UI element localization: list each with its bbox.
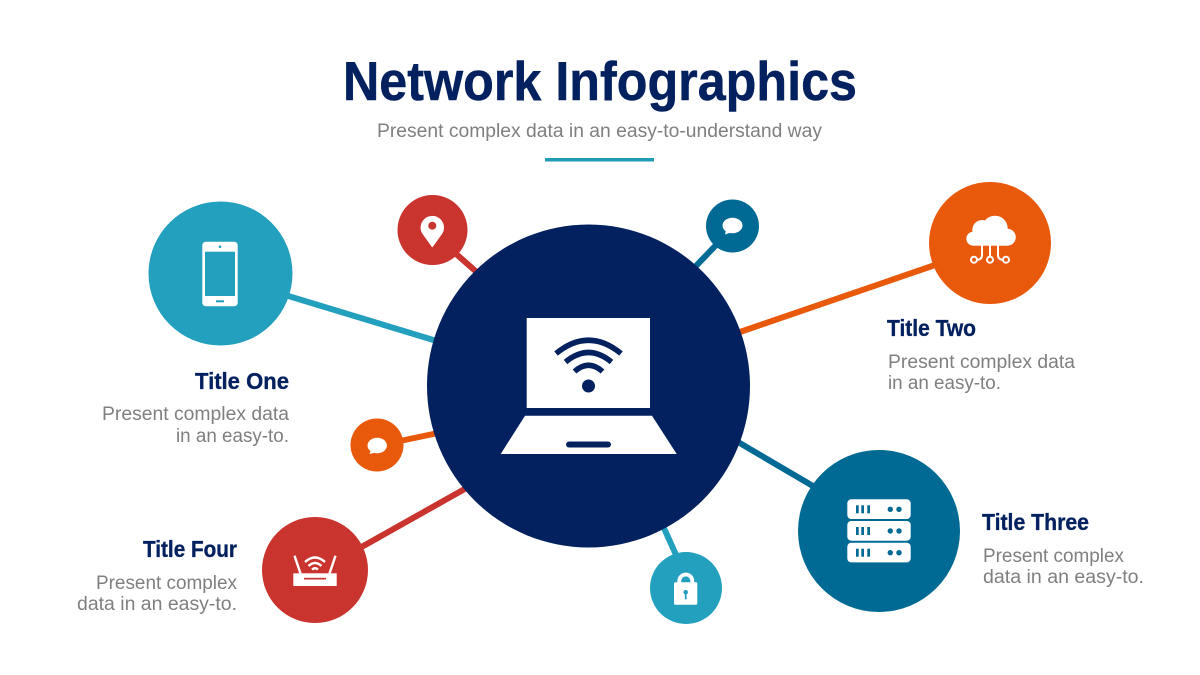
text block: Title Two: Title Two xyxy=(887,315,976,341)
node: server xyxy=(798,450,960,612)
node: router xyxy=(262,517,368,623)
central hub: laptop with wifi xyxy=(427,224,750,548)
node: orange chat bubble xyxy=(350,418,404,472)
text block: Title Four: data in an easy-to. xyxy=(77,594,237,615)
title: Network Infographics xyxy=(343,50,857,112)
text block: Title Three xyxy=(982,509,1144,588)
text block: Title Two xyxy=(887,315,1075,394)
node: cloud xyxy=(929,182,1051,304)
subtitle: Present complex data in an easy-to-understand way xyxy=(377,121,822,142)
node: location pin xyxy=(398,195,468,265)
connector: orange chat to hub xyxy=(400,433,438,441)
node: lock xyxy=(650,552,722,624)
node: blue chat bubble xyxy=(706,200,759,252)
text block: Title Three: Present complex xyxy=(983,546,1124,567)
connector: server to hub xyxy=(738,442,818,489)
text block: Title Two: in an easy-to. xyxy=(888,373,1001,394)
connector: lock to hub xyxy=(663,526,677,557)
connector: router to hub xyxy=(358,486,470,549)
node: phone xyxy=(148,202,292,346)
text block: Title Three: data in an easy-to. xyxy=(983,567,1144,588)
text block: Title Four: Present complex xyxy=(96,573,237,594)
text block: Title One: Title One xyxy=(195,368,289,394)
text block: Title Three: Title Three xyxy=(982,509,1089,535)
text block: Title Two: Present complex data xyxy=(888,352,1075,373)
connector: blue chat to hub xyxy=(694,242,719,268)
text block: Title Four: Title Four xyxy=(143,536,237,562)
connector: phone to hub xyxy=(285,295,440,342)
text block: Title Four xyxy=(77,536,237,615)
connector: cloud to hub xyxy=(740,264,938,332)
text block: Title One: in an easy-to. xyxy=(176,426,289,447)
connector: pin to hub xyxy=(455,253,480,275)
text block: Title One xyxy=(102,368,289,447)
text block: Title One: Present complex data xyxy=(102,404,289,425)
